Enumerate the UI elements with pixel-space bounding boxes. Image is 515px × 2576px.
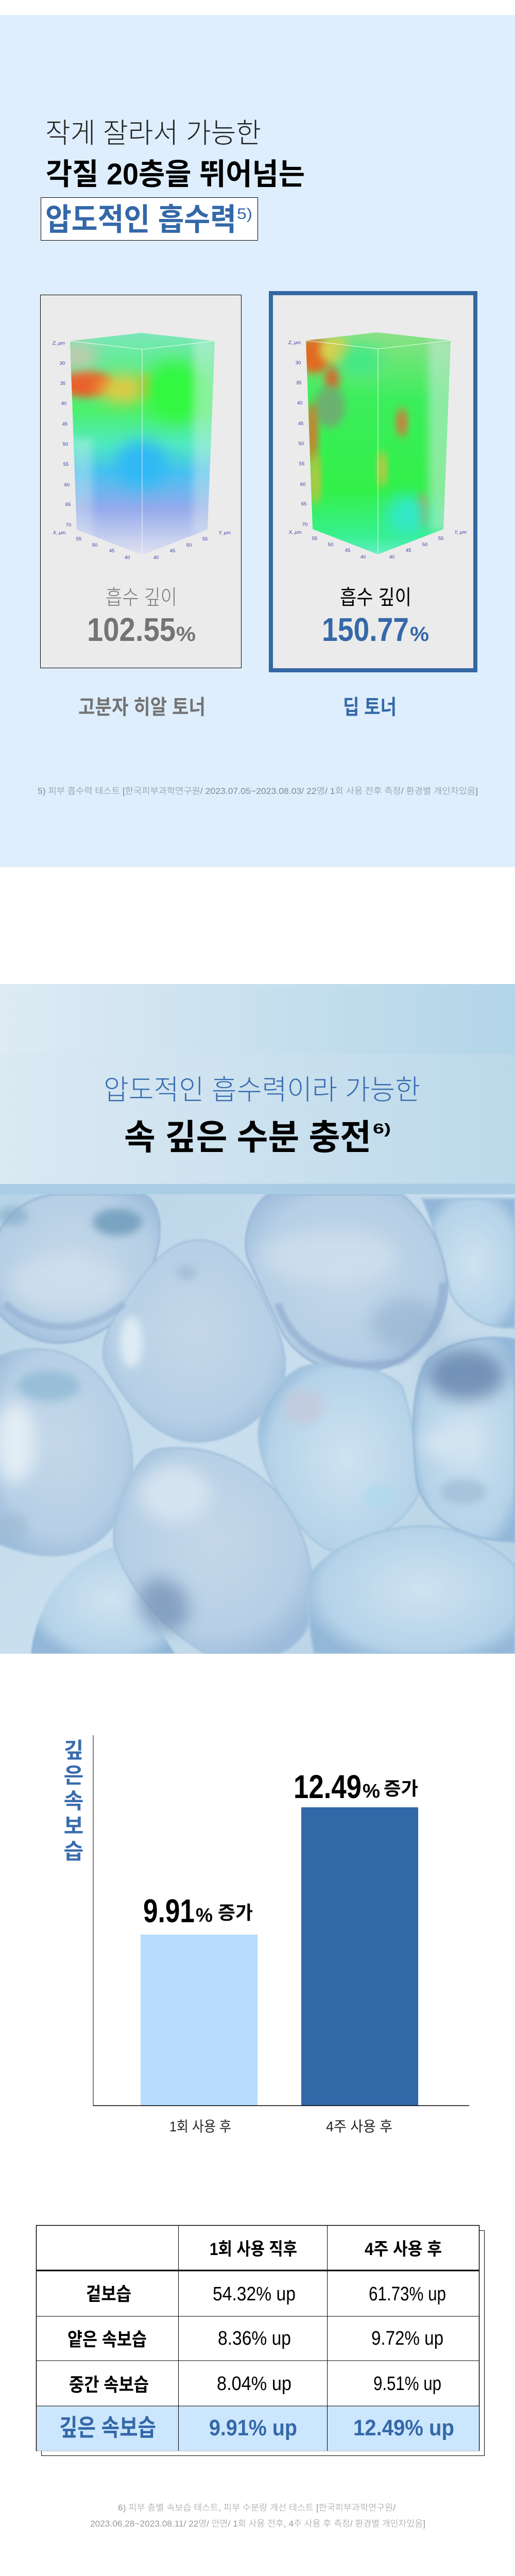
panel: high molecular hyaluronic toner result bbox=[40, 295, 241, 668]
chart: cube axis labels: 55 bbox=[63, 462, 68, 467]
axis label: after one use: 1회 사용 후 bbox=[169, 2119, 231, 2134]
chart: cube axis labels: 55 bbox=[312, 536, 317, 541]
heading: moisture main line: 속 깊은 수분 충전 bbox=[124, 1118, 371, 1157]
value: after one use: 9.91 bbox=[143, 1892, 195, 1929]
table row: deep highlighted: 12.49% up bbox=[353, 2415, 454, 2441]
value: after four weeks: 증가 bbox=[384, 1778, 418, 1799]
table row: shallow: 얕은 속보습 bbox=[67, 2329, 147, 2350]
panel: deep toner result bbox=[271, 293, 475, 670]
text: comparison toner name: 고분자 히알 토너 bbox=[78, 696, 205, 719]
text: footnote 5: 5) 피부 흡수력 테스트 [한국피부과학연구원/ 2023.07.05~2023.08.03/ 22명/ 1회 사용 전후 측정/ 환경별 개인차있음] bbox=[38, 786, 478, 796]
heading: boxed highlight: 압도적인 흡수력 bbox=[45, 202, 236, 237]
chart: cube axis labels: 50 bbox=[63, 442, 68, 447]
chart: cube axis labels: 30 bbox=[60, 361, 65, 366]
heading: boxed highlight: 5) bbox=[237, 206, 252, 223]
chart: cube axis labels: X, μm bbox=[53, 530, 65, 536]
value: after one use bbox=[143, 1892, 253, 1929]
value: after four weeks: % bbox=[363, 1781, 380, 1802]
chart: absorption cube, deep toner bbox=[306, 332, 451, 554]
chart: cube axis labels: 50 bbox=[422, 542, 427, 548]
text: footnote 6: 2023.06.28~2023.08.11/ 22명/ 안면/ 1회 사용 전후, 4주 사용 후 측정/ 환경별 개인차있음] bbox=[90, 2519, 425, 2529]
table row: middle: 9.51% up bbox=[373, 2373, 441, 2395]
heading: absorption main line: 각질 20층을 뛰어넘는 bbox=[46, 158, 305, 191]
heading: moisture intro line: 압도적인 흡수력이라 가능한 bbox=[104, 1075, 420, 1106]
chart: cube axis labels: Z, μm bbox=[288, 340, 301, 346]
table row: deep highlighted: 깊은 속보습 bbox=[59, 2414, 156, 2441]
text: absorption depth value: 102.55 bbox=[87, 611, 176, 648]
chart: cube axis labels: 65 bbox=[301, 501, 306, 507]
text: absorption depth value: 150.77 bbox=[322, 611, 409, 648]
text: footnote 6 bbox=[90, 2503, 425, 2529]
chart: cube axis labels: 35 bbox=[296, 380, 301, 386]
chart: cube axis labels: 35 bbox=[60, 381, 65, 386]
table row: middle: 8.04% up bbox=[217, 2373, 291, 2395]
value: after four weeks bbox=[294, 1768, 418, 1805]
axis label: after four weeks: 4주 사용 후 bbox=[326, 2119, 392, 2134]
chart: cube axis labels: 55 bbox=[299, 461, 304, 467]
table row: surface: 겉보습 bbox=[86, 2283, 131, 2304]
chart: absorption cube, comparison toner bbox=[70, 333, 215, 555]
table row: shallow bbox=[67, 2328, 443, 2350]
chart: cube axis labels: Y, μm bbox=[454, 530, 467, 535]
chart: cube axis labels: 40 bbox=[297, 400, 302, 406]
bar: after four weeks bbox=[301, 1807, 418, 2106]
panel: absorption section background bbox=[0, 15, 515, 867]
chart: cube axis labels: 60 bbox=[300, 482, 305, 487]
table: moisture by skin layer bbox=[36, 2225, 484, 2455]
text: footnote 6: 6) 피부 층별 속보습 테스트, 피부 수분량 개선 테스트 [한국피부과학연구원/ bbox=[118, 2503, 396, 2513]
table row: surface: 61.73% up bbox=[369, 2283, 446, 2305]
table row: surface: 54.32% up bbox=[213, 2283, 296, 2305]
chart: cube axis labels: 55 bbox=[438, 536, 443, 541]
chart: cube axis labels: 65 bbox=[65, 502, 71, 507]
table row: shallow: 8.36% up bbox=[218, 2328, 291, 2349]
image: hydrating water bubbles bbox=[0, 1194, 515, 1654]
chart: cube axis labels: 45 bbox=[170, 548, 175, 554]
panel: moisture header band bbox=[0, 984, 515, 1194]
table row: deep highlighted: 9.91% up bbox=[209, 2415, 297, 2441]
text: absorption depth value: % bbox=[410, 623, 429, 646]
text: absorption depth value: % bbox=[176, 623, 196, 646]
heading: moisture main line: 6) bbox=[373, 1121, 391, 1137]
chart: cube axis labels: 60 bbox=[64, 482, 70, 488]
value: after one use: % bbox=[196, 1905, 213, 1926]
chart: cube axis labels: 45 bbox=[298, 421, 303, 427]
chart: deep moisture bar chart bbox=[60, 1735, 469, 2134]
chart: cube axis labels: 40 bbox=[61, 401, 66, 406]
chart: cube axis labels: 70 bbox=[66, 522, 71, 528]
text: absorption depth label: 흡수 깊이 bbox=[106, 586, 177, 609]
chart: cube axis labels: 50 bbox=[92, 543, 97, 548]
chart: cube axis labels: 45 bbox=[109, 548, 114, 554]
chart: cube axis labels: 45 bbox=[406, 548, 411, 553]
table header: 4주 사용 후 bbox=[365, 2240, 442, 2259]
text: deep toner name: 딥 토너 bbox=[343, 696, 397, 719]
text: absorption depth label: 흡수 깊이 bbox=[340, 586, 411, 609]
chart: cube axis labels: 40 bbox=[389, 554, 394, 560]
chart: cube axis labels: 40 bbox=[125, 555, 130, 561]
value: after four weeks: 12.49 bbox=[294, 1768, 362, 1805]
table row: deep highlighted bbox=[59, 2414, 454, 2441]
chart: cube axis labels: 45 bbox=[345, 548, 350, 553]
chart: cube axis labels: 70 bbox=[302, 522, 307, 528]
table row: surface bbox=[86, 2283, 446, 2305]
chart: cube axis labels bbox=[288, 340, 467, 560]
chart: cube axis labels: 45 bbox=[62, 421, 67, 427]
table row: shallow: 9.72% up bbox=[371, 2328, 443, 2349]
chart: cube axis labels: 40 bbox=[360, 554, 366, 560]
chart: cube axis labels: 30 bbox=[296, 360, 301, 366]
chart: cube axis labels: 40 bbox=[153, 555, 159, 561]
chart: cube axis labels: 55 bbox=[76, 536, 81, 542]
chart: cube axis labels bbox=[52, 341, 231, 561]
table header bbox=[210, 2240, 442, 2259]
bar: after one use bbox=[141, 1935, 258, 2106]
table header: 1회 사용 직후 bbox=[210, 2240, 297, 2259]
label: y axis title: 깊은속보습 bbox=[60, 1739, 84, 1865]
chart: cube axis labels: 50 bbox=[299, 441, 304, 447]
chart: cube axis labels: Y, μm bbox=[218, 530, 231, 536]
chart: cube axis labels: 55 bbox=[202, 536, 208, 542]
table row: middle bbox=[69, 2373, 441, 2395]
chart: cube axis labels: Z, μm bbox=[52, 341, 65, 346]
table row: middle: 중간 속보습 bbox=[69, 2374, 149, 2395]
chart: cube axis labels: 50 bbox=[328, 542, 333, 548]
chart: cube axis labels: X, μm bbox=[288, 530, 301, 535]
chart: cube axis labels: 50 bbox=[186, 543, 192, 548]
heading: absorption intro line: 작게 잘라서 가능한 bbox=[45, 118, 261, 149]
value: after one use: 증가 bbox=[218, 1902, 253, 1923]
